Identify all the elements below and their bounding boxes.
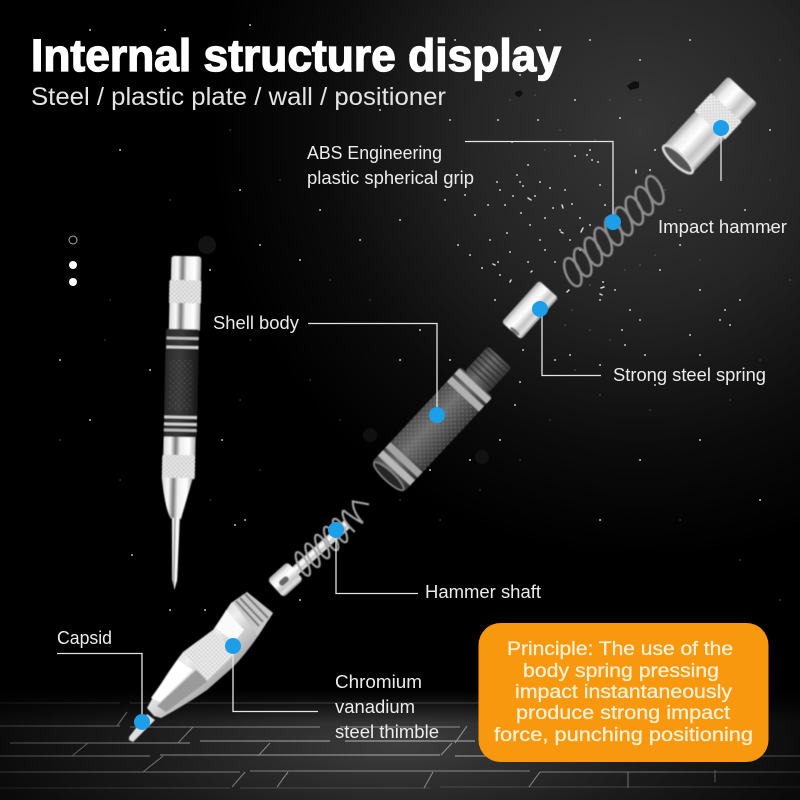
label: chromium vanadium steel thimble: steel thimble xyxy=(335,721,439,742)
leader line: steel spring xyxy=(542,309,601,376)
title: Internal structure display xyxy=(31,30,561,81)
floor: dark brick planks xyxy=(0,690,800,800)
leader line: hammer shaft xyxy=(336,530,418,594)
subtitle: Steel / plastic plate / wall / positioner xyxy=(31,83,446,111)
label: ABS grip: ABS Engineering xyxy=(307,142,442,163)
callout: principle: impact instantaneously xyxy=(515,681,732,703)
part: chromium vanadium thimble xyxy=(129,592,273,742)
leader line: thimble xyxy=(233,645,318,712)
label: shell body: Shell body xyxy=(213,312,300,333)
part: hammer shaft with small spring xyxy=(266,494,378,599)
part: impact hammer sleeve xyxy=(658,76,758,178)
leader line: shell body xyxy=(308,324,437,415)
label: chromium vanadium steel thimble xyxy=(335,671,439,742)
label: hammer shaft: Hammer shaft xyxy=(425,581,541,602)
part: steel pin xyxy=(502,280,558,340)
part: main spring xyxy=(553,170,675,292)
callout: principle xyxy=(478,623,768,762)
assembled center punch xyxy=(159,256,202,590)
leader line: capsid xyxy=(57,654,142,722)
part: shell body xyxy=(369,342,516,495)
carousel dots xyxy=(69,236,77,286)
callout: principle: produce strong impact xyxy=(516,702,731,724)
label: ABS grip xyxy=(307,142,474,188)
callout: principle: force, punching positioning xyxy=(494,724,753,746)
label: ABS grip: plastic spherical grip xyxy=(307,167,474,188)
label: impact hammer: Impact hammer xyxy=(658,216,787,237)
label: strong steel spring: Strong steel spring xyxy=(613,364,766,385)
label: capsid: Capsid xyxy=(57,627,112,648)
leader line: impact hammer xyxy=(720,128,722,181)
leader line: ABS grip xyxy=(465,142,613,222)
blue callout dots xyxy=(134,120,729,730)
callout: principle: body spring pressing xyxy=(523,660,719,682)
label: chromium vanadium steel thimble: vanadium xyxy=(335,696,415,717)
label: chromium vanadium steel thimble: Chromium xyxy=(335,671,422,692)
callout: principle: Principle: The use of the xyxy=(507,638,733,660)
